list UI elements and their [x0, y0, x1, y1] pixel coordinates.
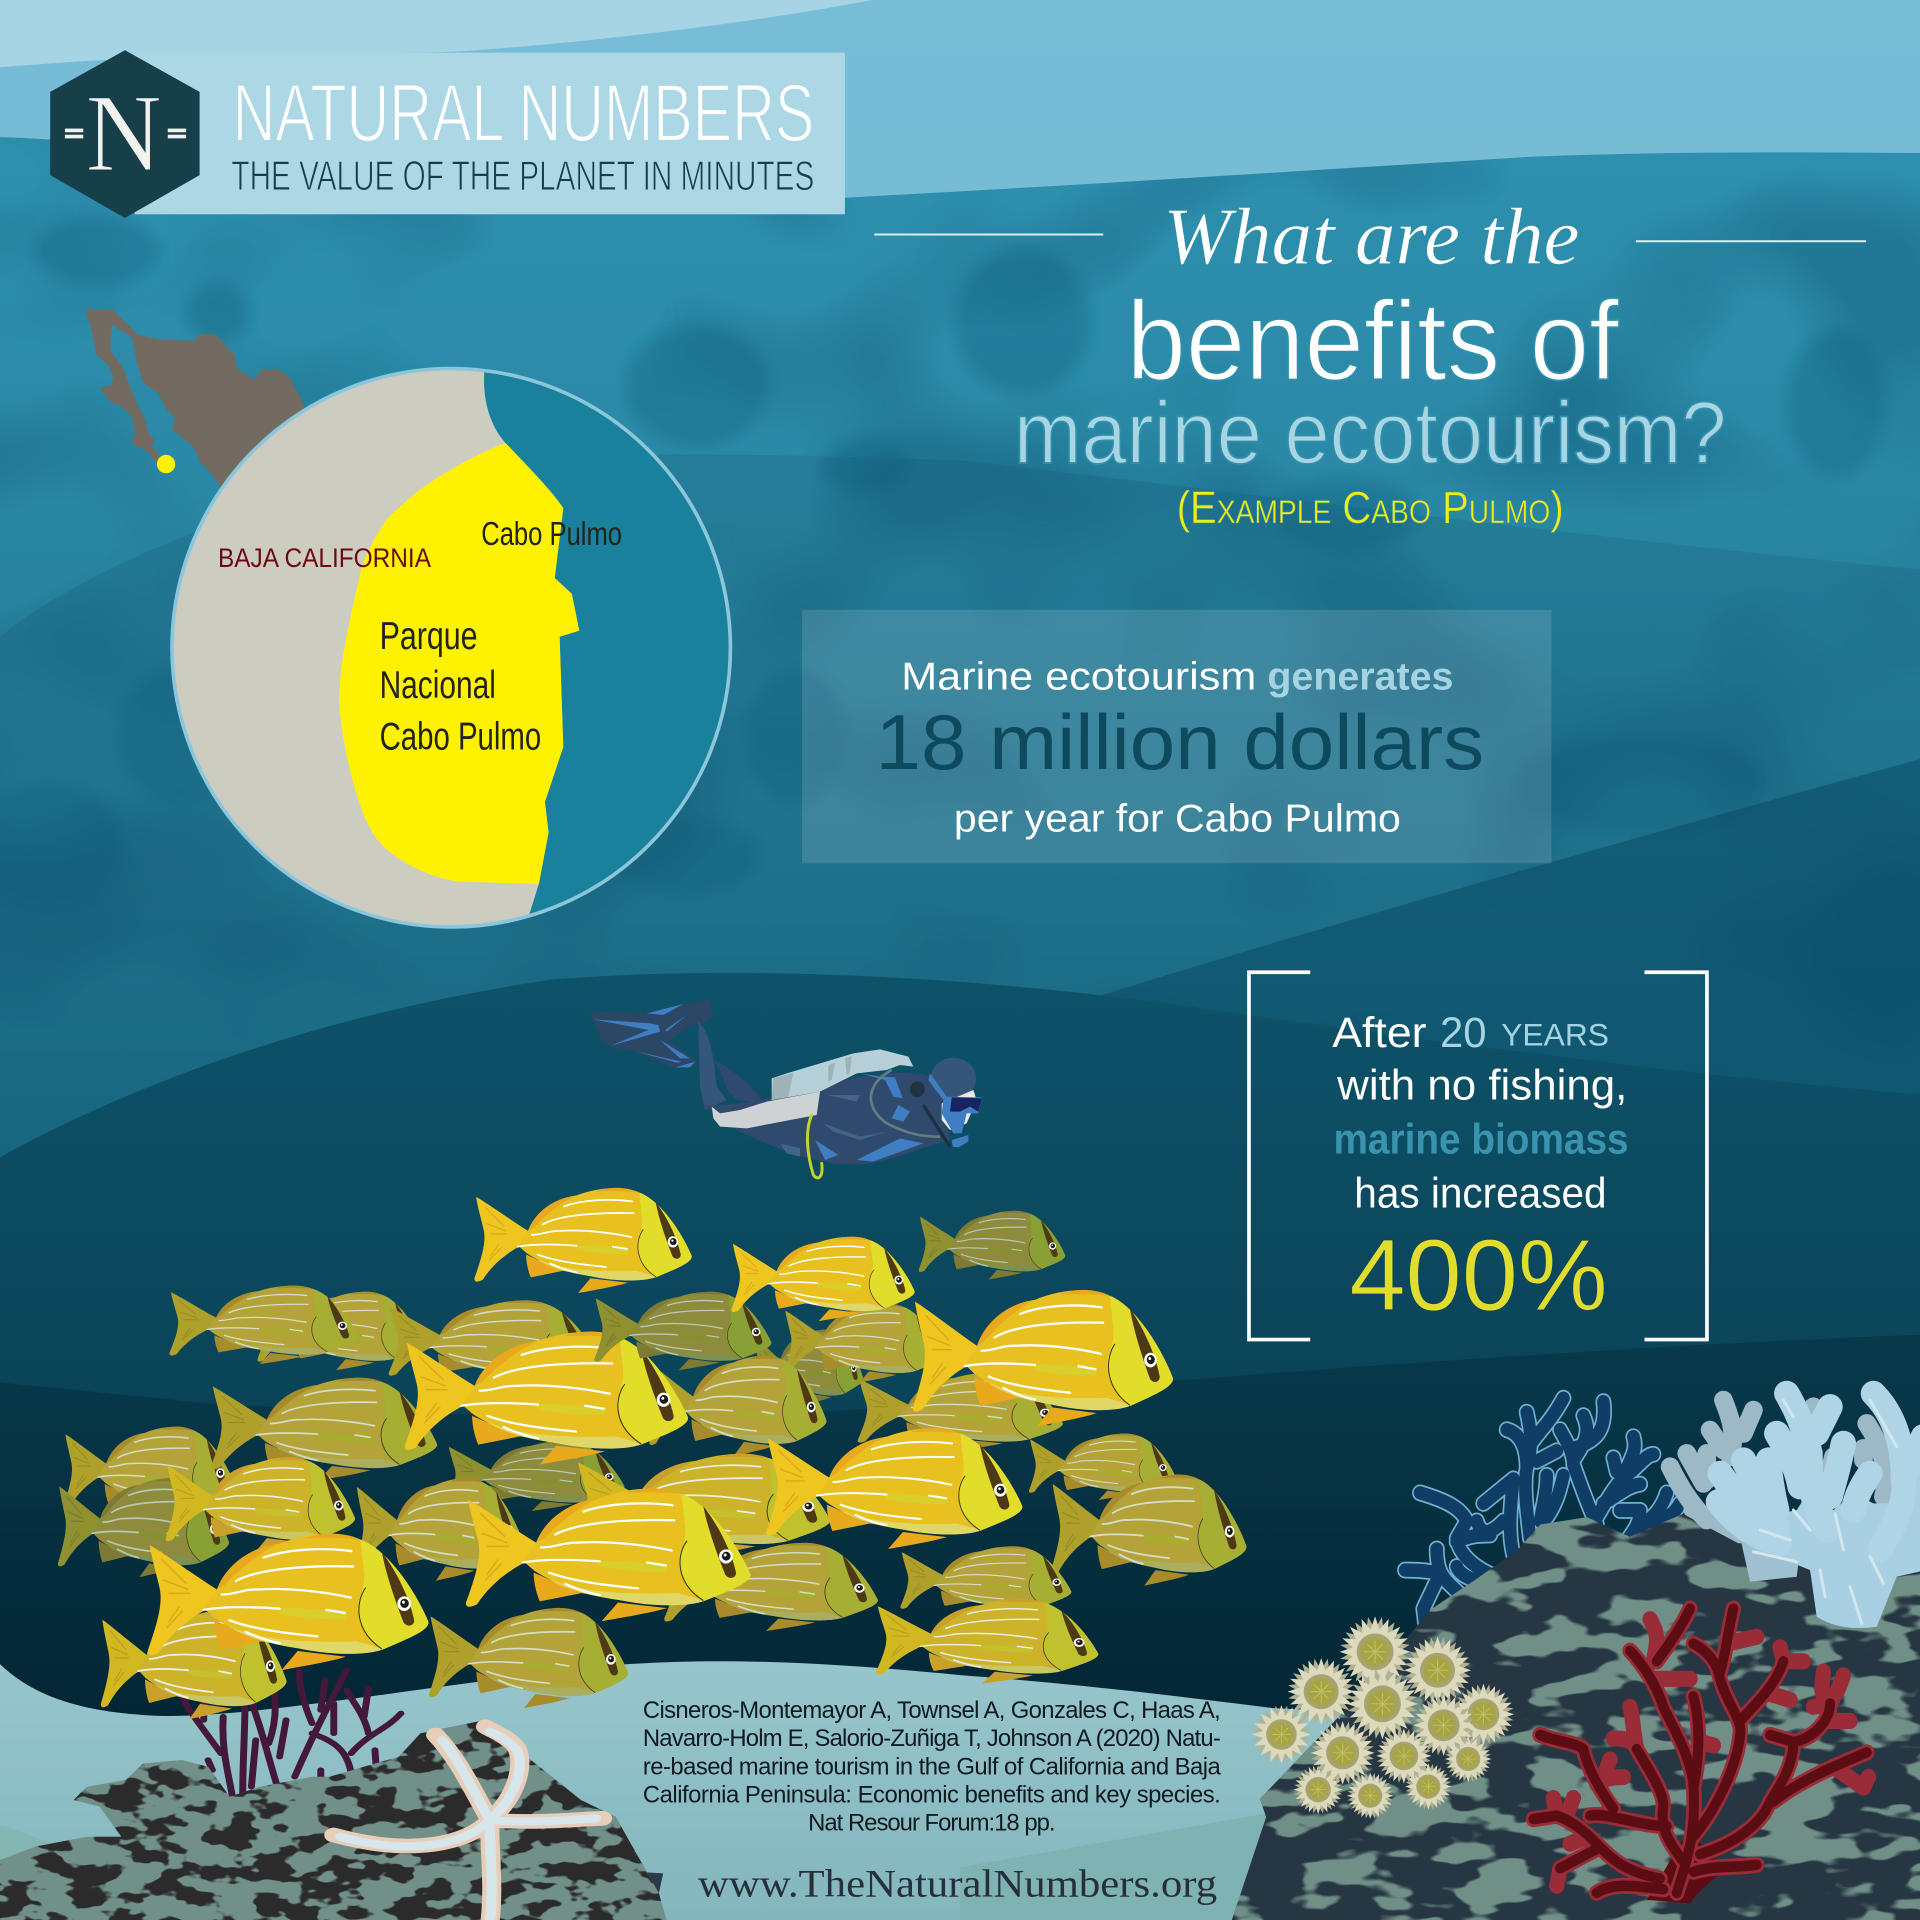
panel: biomass bracket: YEARS — [1501, 1017, 1609, 1053]
website: www.TheNaturalNumbers.org — [698, 1863, 1217, 1906]
citation: Cisneros-Montemayor A, Townsel A, Gonzales C, Haas A, — [643, 1697, 1221, 1724]
rock: right reef — [1232, 1513, 1920, 1920]
protected park area — [339, 443, 579, 884]
headline line 3: marine ecotourism? — [1014, 383, 1727, 482]
header banner — [50, 50, 845, 218]
purple coral — [182, 1667, 401, 1807]
scuba diver — [590, 999, 982, 1178]
label: park name: Nacional — [380, 664, 496, 707]
panel: biomass bracket: marine biomass — [1333, 1115, 1629, 1163]
circular map of Cabo Pulmo — [170, 366, 732, 929]
panel: biomass bracket: 20 — [1440, 1009, 1487, 1057]
brand tagline: THE VALUE OF THE PLANET IN MINUTES — [231, 152, 814, 199]
panel: 18 million dollars: generates — [1267, 655, 1453, 698]
panel: biomass bracket — [1249, 972, 1707, 1340]
brand title: NATURAL NUMBERS — [233, 68, 814, 159]
panel: biomass bracket: has increased — [1354, 1169, 1607, 1217]
citation: Nat Resour Forum:18 pp. — [808, 1810, 1056, 1837]
citation: re-based marine tourism in the Gulf of California and Baja — [643, 1753, 1222, 1780]
anemones — [1247, 1610, 1519, 1823]
panel: 18 million dollars: Marine ecotourism — [901, 655, 1256, 698]
starfish — [334, 1727, 603, 1920]
headline line 1: What are the — [1163, 192, 1580, 281]
citation — [643, 1697, 1222, 1837]
panel: biomass bracket: 400% — [1349, 1218, 1608, 1332]
logo hexagon — [50, 50, 200, 218]
panel: 18 million dollars: 18 million dollars — [876, 698, 1484, 786]
locator dot — [157, 455, 175, 473]
label: park name: Parque — [380, 615, 478, 658]
school of yellow fish — [58, 1188, 1247, 1719]
white coral — [1670, 1393, 1920, 1628]
headline line 2: benefits of — [1127, 278, 1619, 404]
headline example: (Example Cabo Pulmo) — [1177, 482, 1564, 533]
panel: 18 million dollars: per year for Cabo Pulmo — [954, 797, 1401, 840]
locator map of Mexico — [85, 309, 305, 490]
sea area — [484, 372, 729, 914]
rock: left with starfish — [0, 1720, 668, 1920]
logo hexagon: N — [86, 72, 162, 194]
panel: biomass bracket: with no fishing, — [1336, 1062, 1627, 1110]
label: park name: Cabo Pulmo — [380, 715, 541, 758]
label: park name — [380, 615, 541, 758]
panel: 18 million dollars — [802, 610, 1551, 863]
citation: California Peninsula: Economic benefits and key species. — [643, 1781, 1221, 1808]
label: Cabo Pulmo: Cabo Pulmo — [481, 516, 622, 553]
panel: biomass bracket: After — [1332, 1009, 1427, 1057]
label: Baja California: BAJA CALIFORNIA — [218, 543, 431, 573]
citation: Navarro-Holm E, Salorio-Zuñiga T, Johnson A (2020) Natu- — [643, 1725, 1221, 1752]
blue coral — [1405, 1398, 1680, 1623]
headline — [874, 192, 1866, 533]
red coral — [1533, 1609, 1868, 1903]
